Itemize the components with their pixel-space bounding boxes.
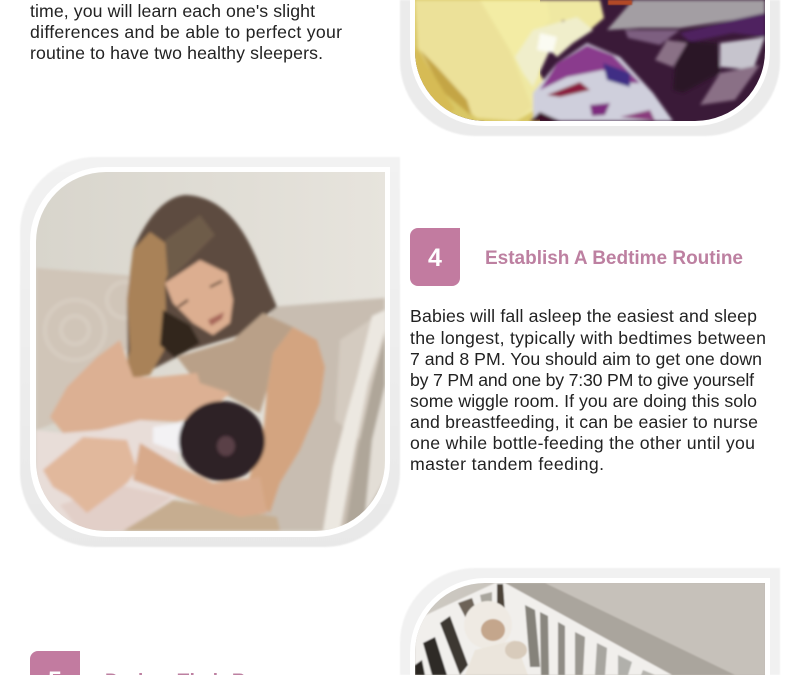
step badge 5 (30, 651, 80, 675)
forearm and hand (50, 340, 230, 433)
hand on baby (43, 437, 137, 513)
baby swaddle (153, 422, 183, 453)
body text: tip 3 ending (30, 1, 342, 63)
body text: tip 4 (410, 306, 766, 474)
photo frame: crib with teddy bear (400, 568, 780, 675)
body text: tip 3 ending: time, you will learn each one's slight (30, 1, 315, 21)
tank top (177, 313, 293, 413)
left sofa cushion (36, 268, 129, 430)
heading: Establish A Bedtime Routine: Establish A Bedtime Routine (485, 248, 743, 269)
body text: tip 4: by 7 PM and one by 7:30 PM to give yourself (410, 370, 754, 390)
step badge 4: 4 (428, 244, 442, 272)
body text: tip 4: the longest, typically with bedtimes between (410, 328, 766, 348)
right pillow (260, 298, 385, 531)
hair (127, 195, 277, 382)
upper arm (245, 327, 325, 513)
pants (123, 500, 280, 531)
baby head (179, 401, 265, 481)
body text: tip 3 ending: differences and be able to perfect your (30, 22, 342, 42)
face (165, 260, 233, 335)
body text: tip 4: master tandem feeding. (410, 454, 604, 474)
body text: tip 4: Babies will fall asleep the easiest and sleep (410, 306, 757, 326)
photo frame: mother nursing baby (20, 157, 400, 547)
blanket (36, 420, 180, 531)
body text: tip 3 ending: routine to have two healthy sleepers. (30, 43, 323, 63)
step badge 4 (410, 228, 460, 286)
body text: tip 4: and breastfeeding, it can be easier to nurse (410, 412, 758, 432)
photo frame: tip 3 laundry photo (400, 0, 780, 136)
lower arm (133, 443, 267, 517)
body text: tip 4: one while bottle-feeding the other until you (410, 433, 755, 453)
body text: tip 4: some wiggle room. If you are doing this solo (410, 391, 757, 411)
teddy bear (464, 601, 512, 649)
body text: tip 4: 7 and 8 PM. You should aim to get one down (410, 349, 762, 369)
